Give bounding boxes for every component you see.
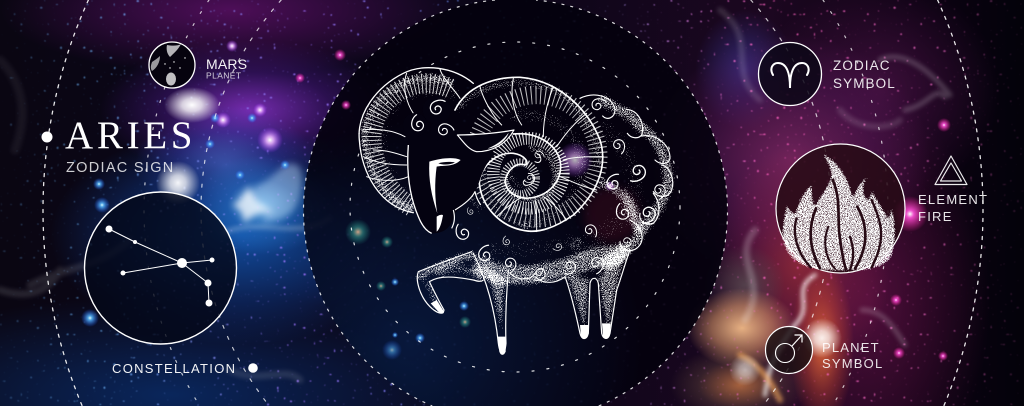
glowing stars [81, 40, 951, 386]
marker dot: constellation [248, 363, 258, 373]
bright flame curl [740, 275, 815, 400]
panel: constellation [84, 192, 236, 344]
ram: stippled shading [364, 77, 668, 340]
label: zodiac symbol: SYMBOL [833, 76, 896, 91]
ram: white hooves [431, 300, 611, 355]
label: zodiac symbol [833, 58, 896, 91]
label: Mars planet: PLANET [206, 70, 241, 80]
central dark circle [303, 0, 728, 406]
title: Aries: ARIES [65, 114, 196, 157]
ram: rear horn [359, 68, 473, 213]
stars inside the central circle [341, 100, 640, 360]
label: Mars planet [206, 56, 247, 80]
label: planet symbol: SYMBOL [822, 356, 883, 371]
icon: fire element circle [776, 144, 905, 273]
ram: forehead curls [403, 96, 455, 141]
subtitle: zodiac sign: ZODIAC SIGN [66, 160, 175, 176]
label: element fire: FIRE [918, 209, 953, 224]
label: element fire [918, 192, 988, 224]
planet: Mars circle [149, 42, 195, 88]
icon: planet symbol [766, 326, 812, 374]
label: planet symbol: PLANET [822, 340, 880, 355]
blue wisp [232, 164, 302, 224]
marker dot: title [42, 132, 52, 142]
flames separations [795, 180, 881, 270]
icon: element triangle [935, 156, 967, 184]
label: planet symbol [822, 340, 883, 371]
ram: body and wool curls [417, 95, 673, 353]
label: zodiac symbol: ZODIAC [833, 58, 891, 73]
label: element fire: ELEMENT [918, 192, 988, 207]
icon: zodiac symbol [758, 42, 822, 106]
flames stipple [782, 153, 895, 271]
ram illustration [359, 68, 673, 355]
label: constellation: CONSTELLATION [112, 361, 236, 376]
ram: front horn [455, 77, 603, 232]
ram: head [407, 130, 514, 233]
label: Mars planet: MARS [206, 56, 247, 72]
